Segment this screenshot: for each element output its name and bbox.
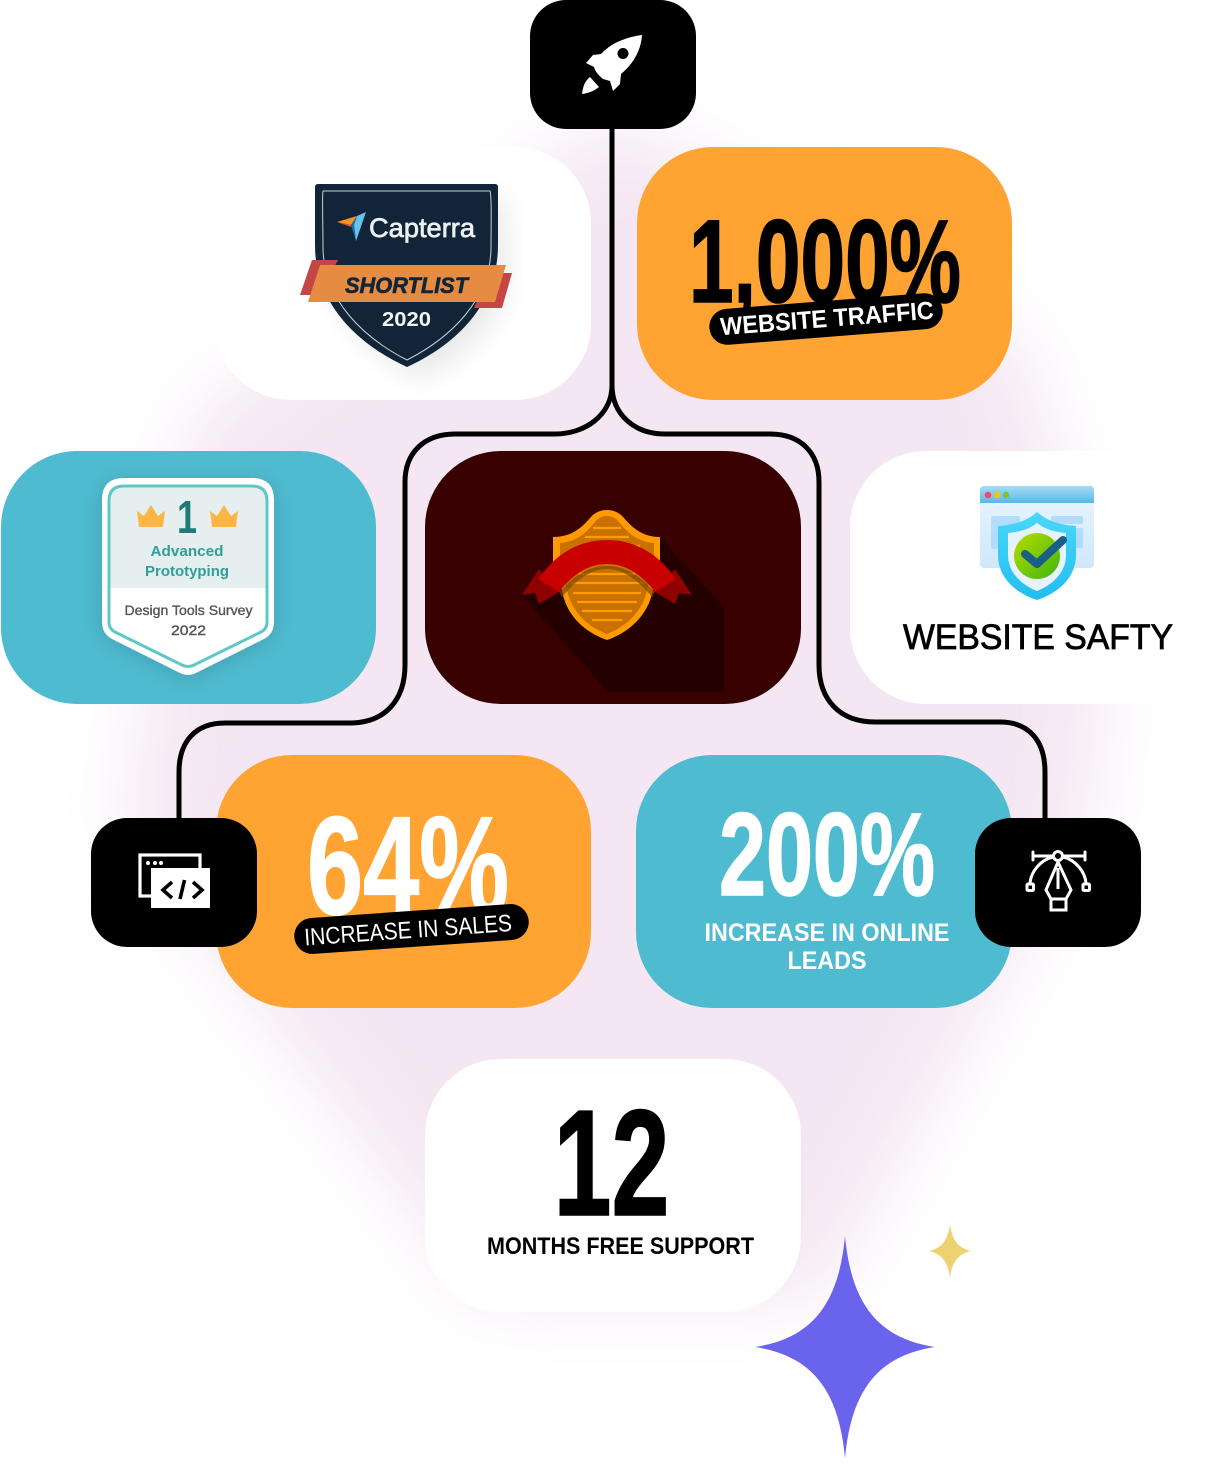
banner label: WEBSITE TRAFFIC [719,297,935,341]
survey label: Design Tools Survey [124,603,253,618]
shield [998,512,1076,600]
online leads label: LEADS [788,947,866,975]
badge shadow [102,481,274,678]
check circle [1014,533,1060,579]
panel: sales card [216,755,591,1008]
icon: left crown [137,505,165,527]
capterra badge [300,184,512,378]
icon: code window [140,855,210,908]
ribbon tail left [522,569,559,604]
rocket tile [530,0,696,129]
advanced prototyping badge [102,478,274,678]
badge upper fill [109,486,267,588]
background glow [125,115,1110,1300]
emblem long shadow [522,537,724,692]
badge outline [109,486,267,666]
online leads label: INCREASE IN ONLINE [704,919,950,947]
online leads label [704,919,950,975]
window content blocks [991,516,1083,549]
central emblem [522,510,724,692]
ribbon tail right [655,569,692,604]
panel: capterra card [215,147,591,400]
shield inner [560,516,654,634]
panel: website safety card [850,451,1226,704]
stat: 64%: 64% [307,787,509,944]
stat: 200%: 200% [719,789,935,921]
banner label: INCREASE IN SALES [303,910,513,951]
year label: 2020 [382,309,431,331]
badge outer [102,478,274,675]
website safety icon [980,486,1094,600]
banner: increase in sales [293,903,530,955]
window dots [985,492,1009,498]
check mark [1025,540,1063,564]
icon: blue sparkle [755,1236,935,1458]
shield [315,184,498,367]
icon: right crown [210,505,238,527]
browser title bar [980,486,1094,503]
shortlist label: SHORTLIST [345,273,470,298]
category label line two: Prototyping [145,563,229,580]
stat: 1,000%: 1,000% [689,196,961,328]
panel: central emblem card [425,451,801,704]
ribbon front [308,265,506,302]
panel: website traffic card [637,147,1012,400]
panel: free support card [425,1059,801,1312]
capterra wordmark: Capterra [369,213,476,243]
code tile [91,818,257,947]
browser window [980,486,1094,568]
shield outer [553,510,660,640]
badge shadow [330,200,505,378]
shield inner [1008,523,1066,591]
icon: rocket [582,35,642,94]
panel: online leads card [636,755,1012,1008]
icon: bezier pen [1027,852,1090,910]
category label: Advanced [150,543,224,560]
pen tool tile [975,818,1141,947]
free support label: MONTHS FREE SUPPORT [487,1233,754,1260]
red ribbon [538,540,676,592]
ribbon back left [300,260,338,295]
connector lines [179,125,1045,822]
icon: gold sparkle [929,1224,971,1278]
shield outline [323,191,491,360]
panel: advanced prototyping card [1,451,376,704]
stat: 12: 12 [554,1078,670,1247]
ribbon back right [474,273,512,308]
website safety label: WEBSITE SAFTY [903,618,1173,657]
rank number: 1 [177,491,197,543]
ribbon shadow [559,566,655,597]
capterra logo [337,212,366,241]
shield stripes [571,528,644,620]
survey year: 2022 [171,622,206,638]
banner: website traffic [708,292,944,346]
